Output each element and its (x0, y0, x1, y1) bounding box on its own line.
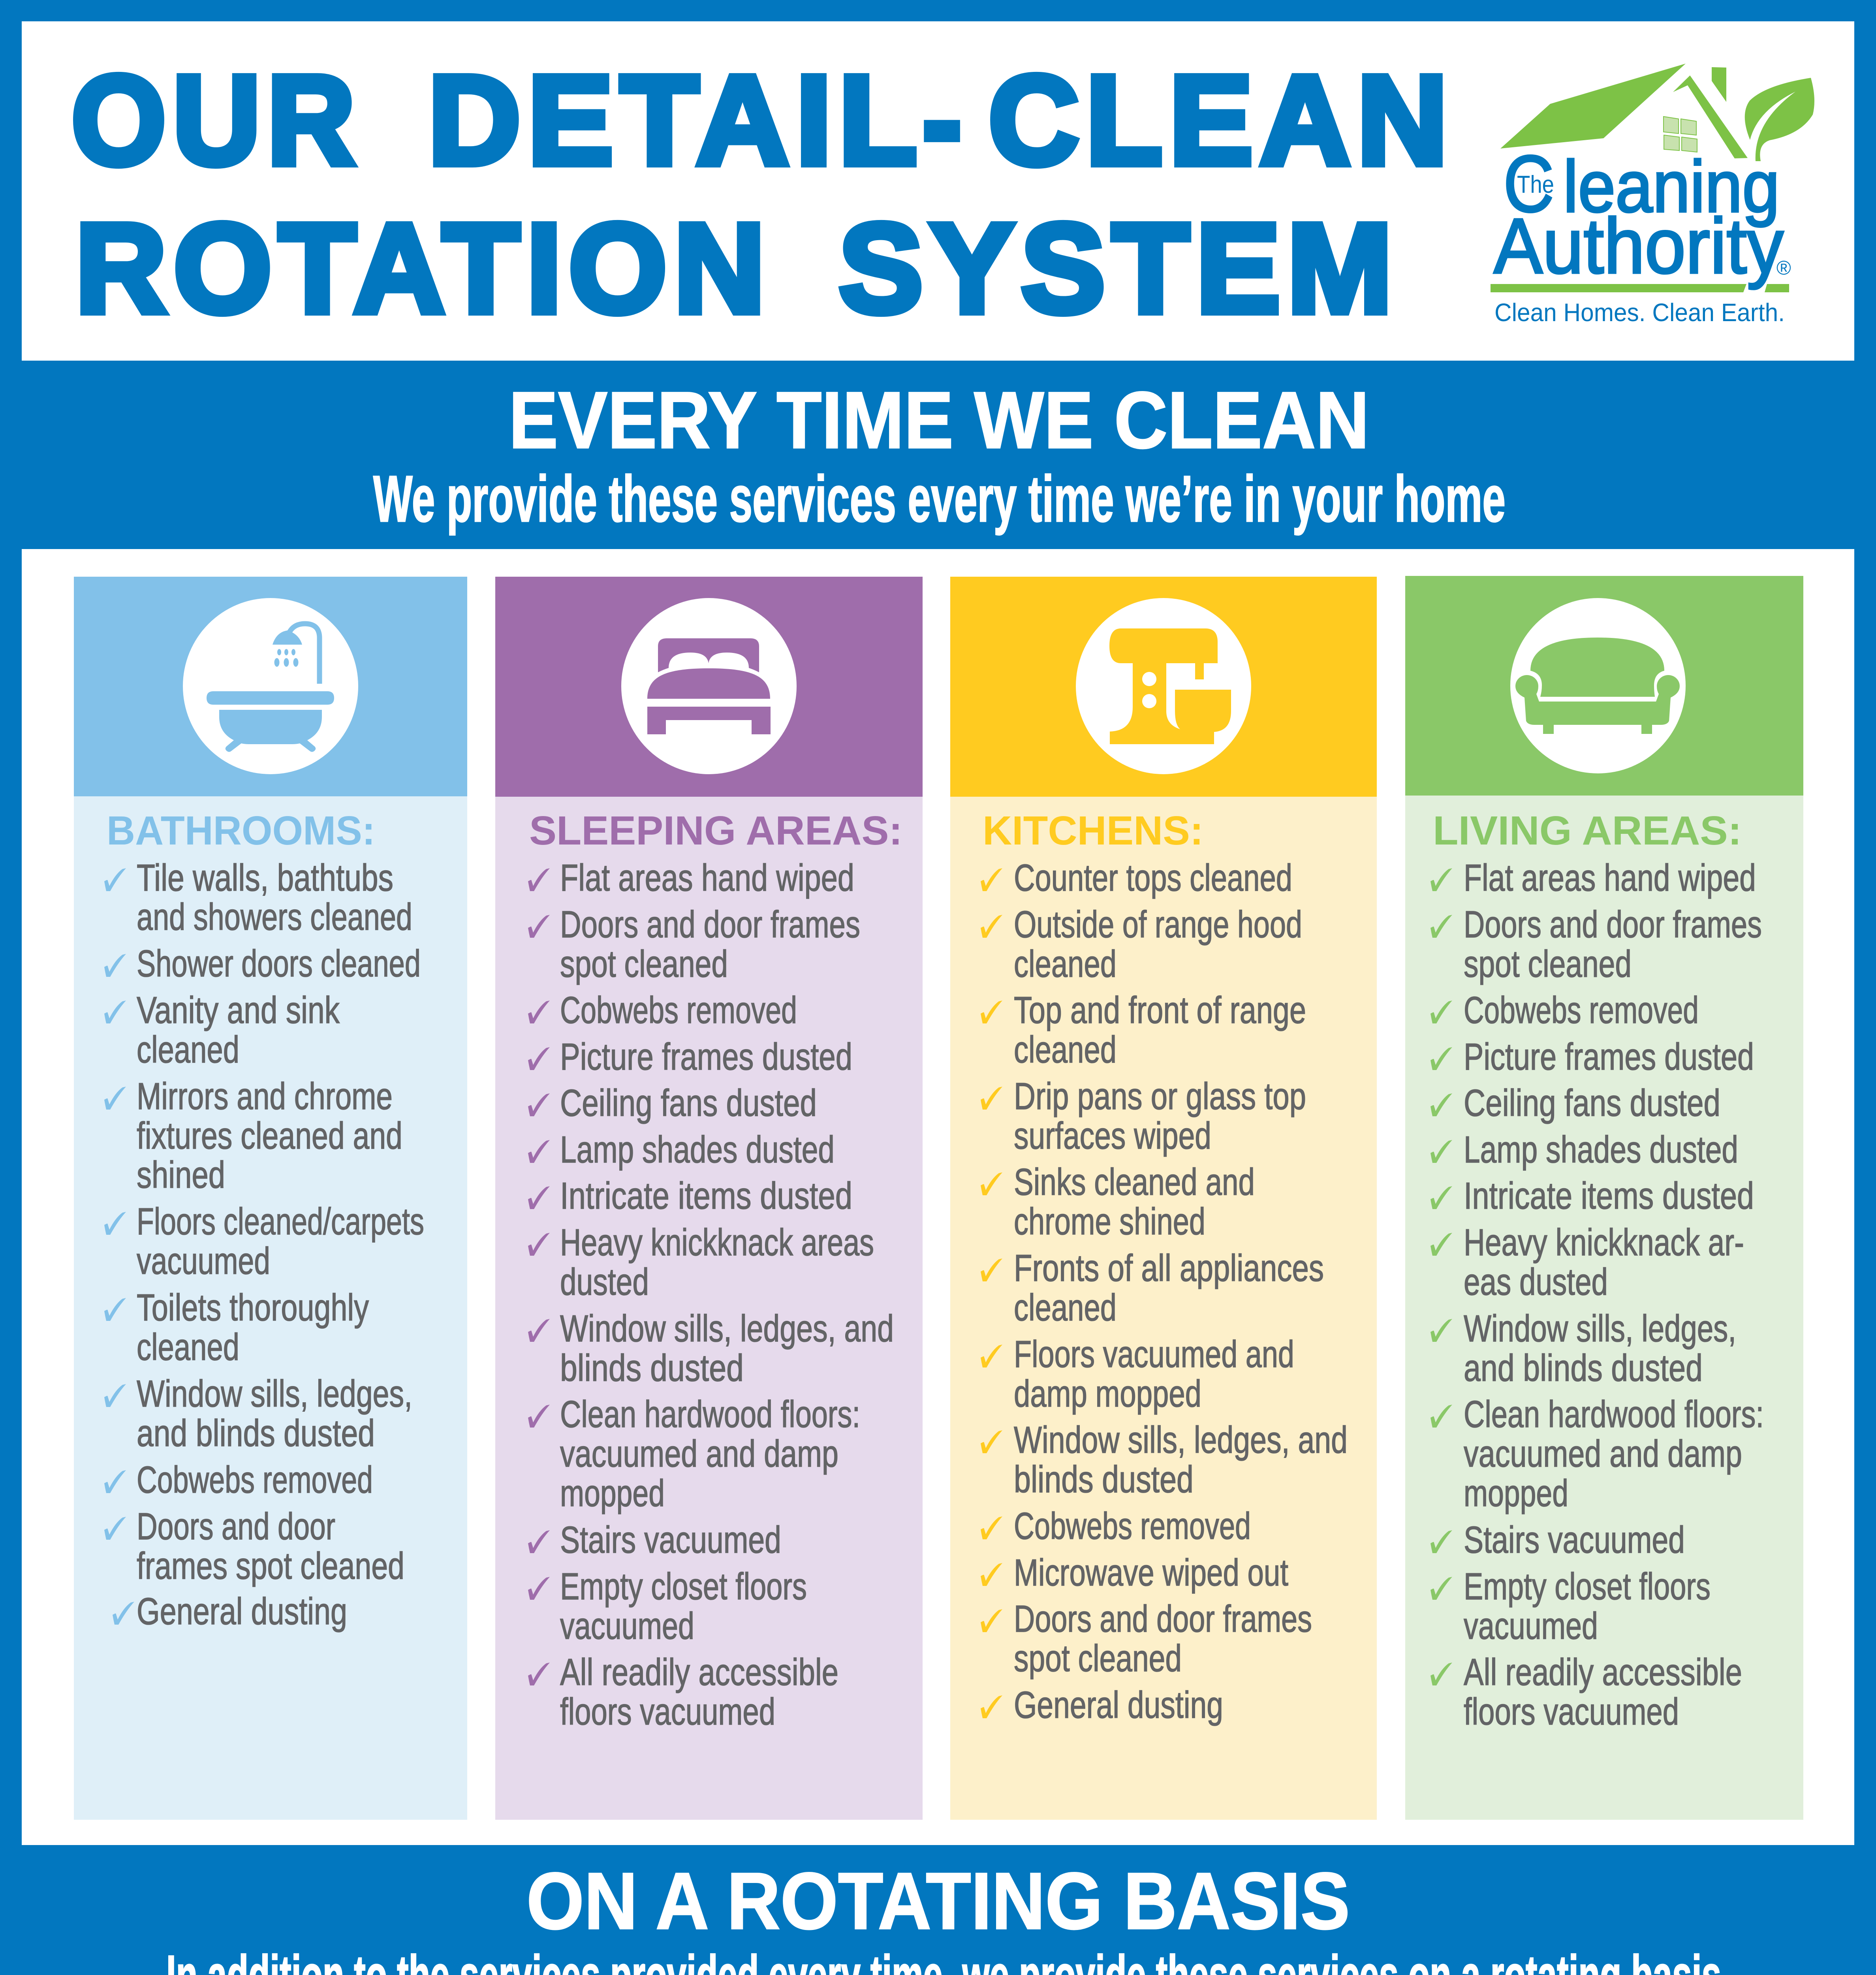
checklist: bathrooms: Window sills, ledges, (137, 1373, 412, 1415)
panel body (1405, 796, 1803, 1820)
panel: kitchens every time (950, 577, 1377, 1820)
checklist: living areas: Flat areas hand wiped (1464, 857, 1756, 899)
checklist: living areas: Intricate items dusted (1464, 1175, 1754, 1217)
checklist: bathrooms: Vanity and sink (137, 989, 340, 1031)
logo: The Cleaning Authority: The (1517, 171, 1554, 198)
checklist: sleeping areas: All readily accessible (560, 1651, 838, 1693)
checklist: bathrooms: Shower doors cleaned (137, 942, 421, 985)
logo: The Cleaning Authority (1491, 64, 1814, 327)
checklist: living areas: Stairs vacuumed (1464, 1519, 1685, 1561)
logo: The Cleaning Authority: Clean Homes. Clean Earth. (1494, 298, 1785, 327)
panel: sleeping areas every time (495, 577, 923, 1820)
panel header (1405, 576, 1803, 796)
checklist: living areas: mopped (1464, 1472, 1568, 1514)
checklist: bathrooms: frames spot cleaned (137, 1545, 404, 1587)
checklist: bathrooms: General dusting (137, 1590, 347, 1633)
checklist: sleeping areas: floors vacuumed (560, 1691, 775, 1733)
heading: on a rotating basis: ON A ROTATING BASIS (526, 1856, 1350, 1946)
panel body (74, 796, 467, 1820)
title: OUR (71, 49, 362, 191)
checklist: living areas: floors vacuumed (1464, 1691, 1679, 1733)
checklist: sleeping areas: Ceiling fans dusted (560, 1082, 817, 1124)
panel body (495, 797, 923, 1820)
checklist: sleeping areas: Lamp shades dusted (560, 1129, 835, 1171)
checklist: sleeping areas: Flat areas hand wiped (560, 857, 854, 899)
checklist: living areas: Empty closet floors (1464, 1565, 1711, 1608)
checklist: bathrooms: and blinds dusted (137, 1412, 375, 1454)
panel header (495, 577, 923, 797)
panel: bathrooms every time (74, 577, 467, 1820)
checklist: sleeping areas: Window sills, ledges, and (560, 1307, 894, 1350)
checklist: living areas: Cobwebs removed (1464, 989, 1699, 1031)
checklist: kitchens: Sinks cleaned and (1014, 1161, 1255, 1203)
checklist: sleeping areas: spot cleaned (560, 943, 728, 985)
checklist: kitchens (981, 857, 1348, 1726)
checklist: sleeping areas: Heavy knickknack areas (560, 1221, 874, 1264)
title (71, 49, 1455, 339)
checklist: bathrooms: Cobwebs removed (137, 1459, 373, 1501)
section panel: every time we clean (22, 549, 1854, 1845)
checklist: living areas: vacuumed and damp (1464, 1433, 1742, 1475)
checklist: living areas (1430, 857, 1764, 1733)
checklist: living areas: spot cleaned (1464, 943, 1632, 985)
checklist: bathrooms: Mirrors and chrome (137, 1075, 393, 1117)
checklist: bathrooms: Doors and door (137, 1505, 335, 1548)
checklist: kitchens: damp mopped (1014, 1373, 1201, 1415)
checklist: kitchens: Counter tops cleaned (1014, 857, 1292, 899)
checklist: kitchens: Window sills, ledges, and (1014, 1419, 1348, 1461)
checklist: kitchens: General dusting (1014, 1684, 1223, 1726)
checklist: sleeping areas: mopped (560, 1472, 665, 1514)
icon: stand mixer (1076, 598, 1251, 774)
checklist: kitchens: blinds dusted (1014, 1458, 1194, 1501)
header panel (22, 21, 1854, 361)
checklist: sleeping areas (528, 857, 894, 1733)
title: SYSTEM (839, 198, 1399, 339)
icon: bed (621, 598, 797, 774)
checklist: living areas: Clean hardwood floors: (1464, 1393, 1764, 1435)
checklist: sleeping areas: Picture frames dusted (560, 1036, 852, 1078)
checklist: bathrooms: Toilets thoroughly (137, 1287, 369, 1329)
heading: every time we clean: EVERY TIME WE CLEAN (509, 375, 1369, 465)
checklist: kitchens: Fronts of all appliances (1014, 1247, 1324, 1289)
checklist: bathrooms: shined (137, 1154, 225, 1196)
checklist: bathrooms: cleaned (137, 1326, 239, 1368)
heading: sleeping areas: SLEEPING AREAS: (529, 808, 902, 853)
checklist: kitchens: chrome shined (1014, 1200, 1205, 1243)
panel body (950, 797, 1377, 1820)
title: CLEAN (989, 49, 1455, 191)
checklist: sleeping areas: dusted (560, 1261, 649, 1303)
icon: sofa (1510, 598, 1686, 773)
title: ROTATION (75, 198, 772, 339)
checklist: kitchens: Top and front of range (1014, 989, 1306, 1031)
logo: The Cleaning Authority: leaning (1563, 146, 1780, 228)
logo: The Cleaning Authority: C (1503, 139, 1554, 229)
checklist: sleeping areas: Clean hardwood floors: (560, 1393, 860, 1435)
checklist: sleeping areas: blinds dusted (560, 1347, 744, 1389)
checklist: bathrooms: and showers cleaned (137, 896, 412, 938)
heading: kitchens: KITCHENS: (983, 808, 1203, 853)
checklist: living areas: Window sills, ledges, (1464, 1307, 1736, 1350)
checklist: kitchens: cleaned (1014, 1287, 1117, 1329)
checklist: sleeping areas: vacuumed and damp (560, 1433, 838, 1475)
checklist: sleeping areas: Empty closet floors (560, 1565, 807, 1608)
checklist: bathrooms: Tile walls, bathtubs (137, 857, 393, 899)
checklist: sleeping areas: vacuumed (560, 1605, 694, 1647)
checklist: kitchens: Doors and door frames (1014, 1598, 1312, 1640)
heading: bathrooms: BATHROOMS: (107, 808, 375, 853)
checklist: living areas: and blinds dusted (1464, 1347, 1703, 1389)
checklist: living areas: Doors and door frames (1464, 903, 1762, 946)
checklist: kitchens: Microwave wiped out (1014, 1552, 1288, 1594)
checklist: living areas: vacuumed (1464, 1605, 1598, 1647)
checklist: kitchens: Cobwebs removed (1014, 1505, 1251, 1547)
checklist: kitchens: cleaned (1014, 1029, 1117, 1071)
title: DETAIL (428, 49, 924, 191)
checklist: kitchens: Floors vacuumed and (1014, 1333, 1294, 1375)
checklist: living areas: Ceiling fans dusted (1464, 1082, 1720, 1124)
checklist: kitchens: Outside of range hood (1014, 903, 1302, 946)
panel: living areas every time (1405, 576, 1803, 1820)
checklist: sleeping areas: Cobwebs removed (560, 989, 797, 1031)
logo: The Cleaning Authority: ® (1776, 257, 1791, 279)
checklist: living areas: Picture frames dusted (1464, 1036, 1754, 1078)
checklist: bathrooms: cleaned (137, 1029, 239, 1071)
checklist: sleeping areas: Stairs vacuumed (560, 1519, 781, 1561)
checklist: bathrooms: fixtures cleaned and (137, 1115, 402, 1157)
checklist: bathrooms: vacuumed (137, 1240, 270, 1282)
checklist: living areas: Heavy knickknack ar- (1464, 1221, 1744, 1264)
panel header (74, 577, 467, 796)
checklist: living areas: Lamp shades dusted (1464, 1129, 1738, 1171)
checklist: kitchens: cleaned (1014, 943, 1117, 985)
checklist: kitchens: spot cleaned (1014, 1637, 1182, 1680)
checklist: sleeping areas: Intricate items dusted (560, 1175, 852, 1217)
heading: living areas: LIVING AREAS: (1433, 808, 1742, 853)
checklist: living areas: All readily accessible (1464, 1651, 1742, 1693)
checklist: bathrooms: Floors cleaned/carpets (137, 1200, 424, 1243)
checklist: kitchens: surfaces wiped (1014, 1115, 1211, 1157)
logo: The Cleaning Authority: Authority (1494, 202, 1784, 290)
checklist: kitchens: Drip pans or glass top (1014, 1075, 1306, 1117)
checklist: bathrooms (104, 857, 424, 1633)
checklist: living areas: eas dusted (1464, 1261, 1608, 1303)
checklist: sleeping areas: Doors and door frames (560, 903, 860, 946)
panel header (950, 577, 1377, 797)
icon: bathtub and shower (183, 598, 358, 774)
title: - (923, 49, 968, 191)
